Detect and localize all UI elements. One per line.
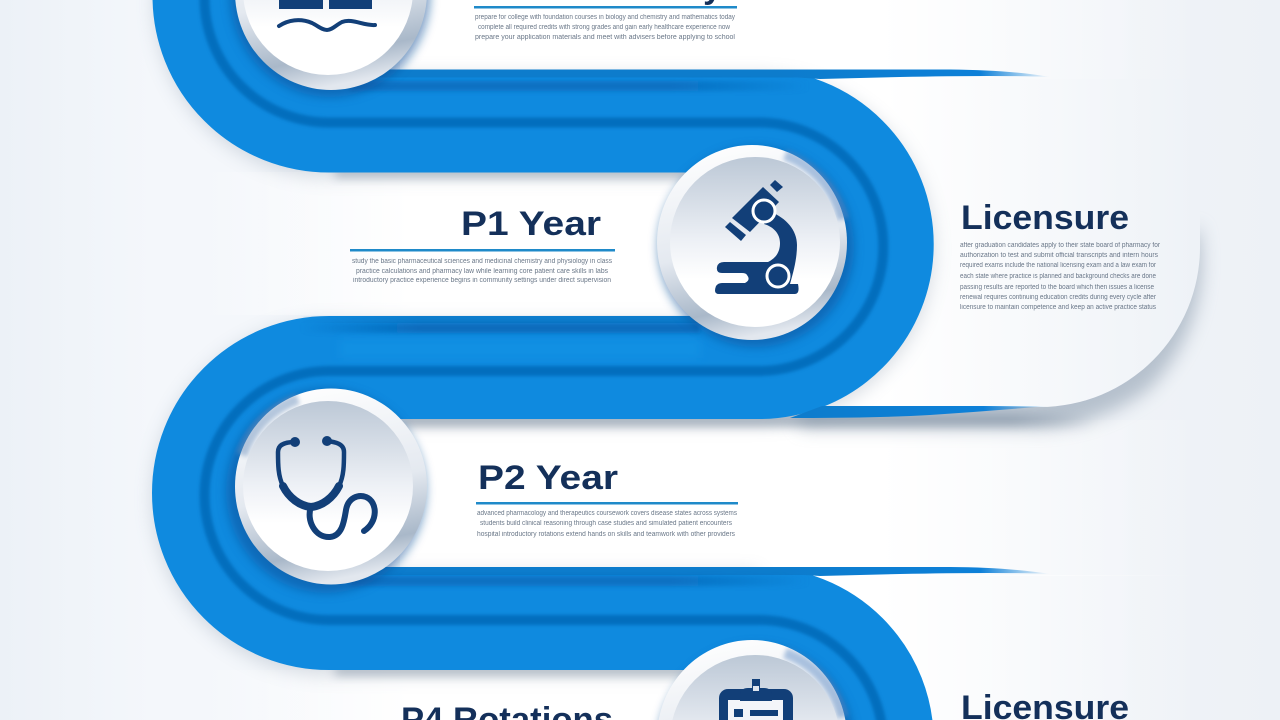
ribbon shadow [204,0,882,624]
panel: second Licensure [780,575,1200,720]
shadow under P1 ribbon band [335,168,690,177]
text block: P1 Year [352,258,612,284]
serpentine ribbon [204,0,883,720]
icon: stethoscope [278,436,375,537]
text block: Licensure: each state where practice is planned and background checks are done [960,273,1156,280]
text block: P1 Year: practice calculations and pharmacy law while learning core patient care skills in labs [356,268,608,275]
panel: P2 Year [400,420,1200,576]
shadow under P2 ribbon band [400,415,1095,426]
text block: Licensure: authorization to test and submit official transcripts and intern hours [960,252,1158,259]
text block: top step: prepare for college with foundation courses in biology and chemistry and mathematics today [475,14,735,21]
text block: top step [475,14,735,41]
heading: P2 Year: P2 Year [478,459,618,497]
rule: P1 Year [350,249,615,252]
text block: Licensure: after graduation candidates apply to their state board of pharmacy for [960,242,1161,249]
text block: P1 Year: introductory practice experience begins in community settings under direct supervision [353,277,611,284]
rule: P2 Year [476,502,738,504]
text block: P2 Year: advanced pharmacology and therapeutics coursework covers disease states across systems [477,510,737,517]
step: stethoscope node [226,388,427,593]
step: clipboard node [657,640,854,720]
text block: top step: complete all required credits with strong grades and gain early healthcare experience now [478,24,731,31]
panel shadow: Licensure [800,225,1201,428]
rule: top step [474,6,737,8]
text block: Licensure: required exams include the national licensing exam and a law exam for [960,262,1157,269]
text block: P1 Year: study the basic pharmaceutical sciences and medicinal chemistry and physiology in class [352,258,612,265]
icon: open book [279,0,375,30]
panel: top step [400,0,1200,79]
panel: Licensure [780,79,1200,407]
panel: P4 Rotations [200,670,800,720]
heading: Licensure: Licensure [961,199,1129,237]
text block: P2 Year: hospital introductory rotations extend hands on skills and teamwork with other providers [477,531,735,538]
text block: P2 Year: students build clinical reasoning through case studies and simulated patient encounters [480,520,732,527]
text block: Licensure: renewal requires continuing education credits during every cycle after [960,294,1157,301]
text block: Licensure: passing results are reported to the board which then issues a license [960,284,1154,291]
taper: top of Licensure panel [770,70,1050,79]
heading: P1 Year: P1 Year [461,205,601,243]
text block: top step: prepare your application materials and meet with advisers before applying to school [475,34,735,41]
step: microscope node [657,145,854,347]
text block: Licensure: licensure to maintain competence and keep an active practice status [960,304,1156,311]
step: top book node [230,0,430,97]
text block: Licensure [960,242,1161,311]
taper: top of second Licensure panel [770,567,1050,576]
shadow under P3 ribbon band [335,666,690,675]
panel: P1 Year [200,172,800,315]
icon: clipboard [719,679,793,720]
icon: microscope [715,180,799,294]
taper: bottom of Licensure panel [790,406,1048,418]
text block: P2 Year [477,510,737,538]
